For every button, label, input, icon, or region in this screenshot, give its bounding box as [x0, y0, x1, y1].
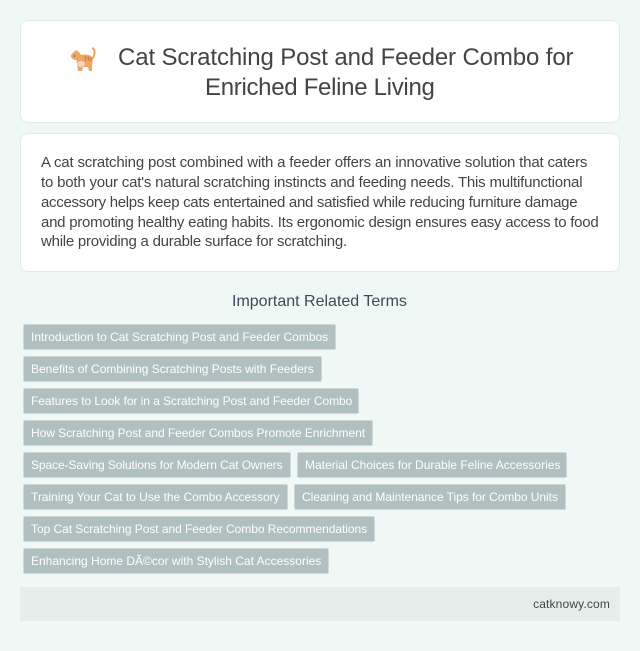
tag: [23, 356, 322, 382]
tag: Space-Saving Solutions for Modern Cat Owners: [31, 458, 282, 472]
description text: [41, 154, 598, 250]
tag: [23, 484, 288, 510]
tag list: [23, 324, 567, 574]
heading: related terms: Important Related Terms: [232, 293, 407, 310]
tag: [23, 324, 336, 350]
tag: Features to Look for in a Scratching Post and Feeder Combo: [31, 394, 352, 408]
tag: [23, 452, 291, 478]
title line 1: Cat Scratching Post and Feeder Combo for: [118, 44, 573, 71]
panel: title card: [20, 20, 620, 123]
tag: [297, 452, 567, 478]
tag: [294, 484, 566, 510]
title line 2: Enriched Feline Living: [205, 74, 435, 101]
tag: Material Choices for Durable Feline Accessories: [305, 458, 560, 472]
tag: Top Cat Scratching Post and Feeder Combo Recommendations: [31, 522, 367, 536]
tag: [23, 548, 329, 574]
tag: How Scratching Post and Feeder Combos Promote Enrichment: [31, 426, 365, 440]
description text: accessory helps keep cats entertained and satisfied while reducing furniture damage: [41, 194, 577, 211]
footer text: catknowy.com: [533, 597, 610, 611]
description text: and promoting healthy eating habits. Its ergonomic design ensures easy access to food: [41, 214, 598, 231]
tag: [23, 516, 375, 542]
description text: while providing a durable surface for scratching.: [41, 233, 347, 250]
tag: [23, 388, 359, 414]
tag: Benefits of Combining Scratching Posts with Feeders: [31, 362, 314, 376]
panel: description: [20, 133, 620, 272]
icon: cat: [71, 47, 96, 71]
tag: [23, 420, 373, 446]
description text: to both your cat's natural scratching instincts and feeding needs. This multifunctional: [41, 174, 582, 191]
description text: A cat scratching post combined with a feeder offers an innovative solution that caters: [41, 154, 587, 171]
tag: Training Your Cat to Use the Combo Accessory: [31, 490, 280, 504]
tag: Cleaning and Maintenance Tips for Combo Units: [302, 490, 558, 504]
tag: Introduction to Cat Scratching Post and Feeder Combos: [31, 330, 328, 344]
footer bar: [20, 587, 620, 621]
tag: Enhancing Home DÃ©cor with Stylish Cat Accessories: [31, 554, 321, 568]
